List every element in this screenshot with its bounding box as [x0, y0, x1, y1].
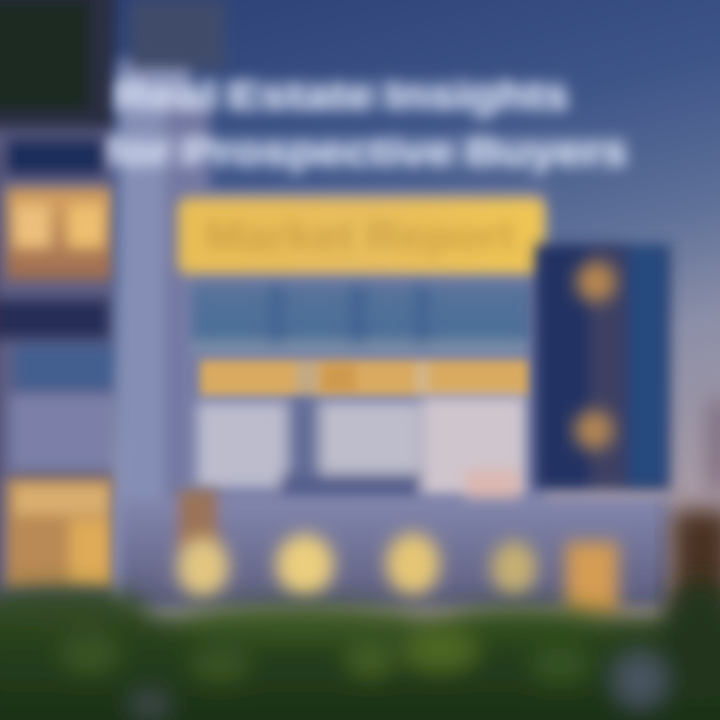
yellow banner	[178, 198, 545, 274]
left building	[0, 0, 115, 620]
title: Real Estate Insights	[114, 72, 570, 119]
white panels	[197, 396, 526, 520]
right edge trees	[672, 400, 720, 620]
foliage	[0, 580, 720, 720]
left building lit windows	[6, 188, 114, 590]
yellow banner: Market Report	[205, 212, 515, 259]
tower lights	[574, 262, 616, 450]
lower building	[120, 490, 670, 608]
building column	[118, 0, 225, 600]
orange band	[200, 360, 530, 396]
title: for Prospective Buyers	[106, 128, 628, 175]
title	[106, 72, 628, 175]
right tower	[535, 244, 670, 490]
ground lights	[177, 533, 618, 620]
central facade	[180, 190, 545, 510]
blue band	[192, 284, 530, 352]
